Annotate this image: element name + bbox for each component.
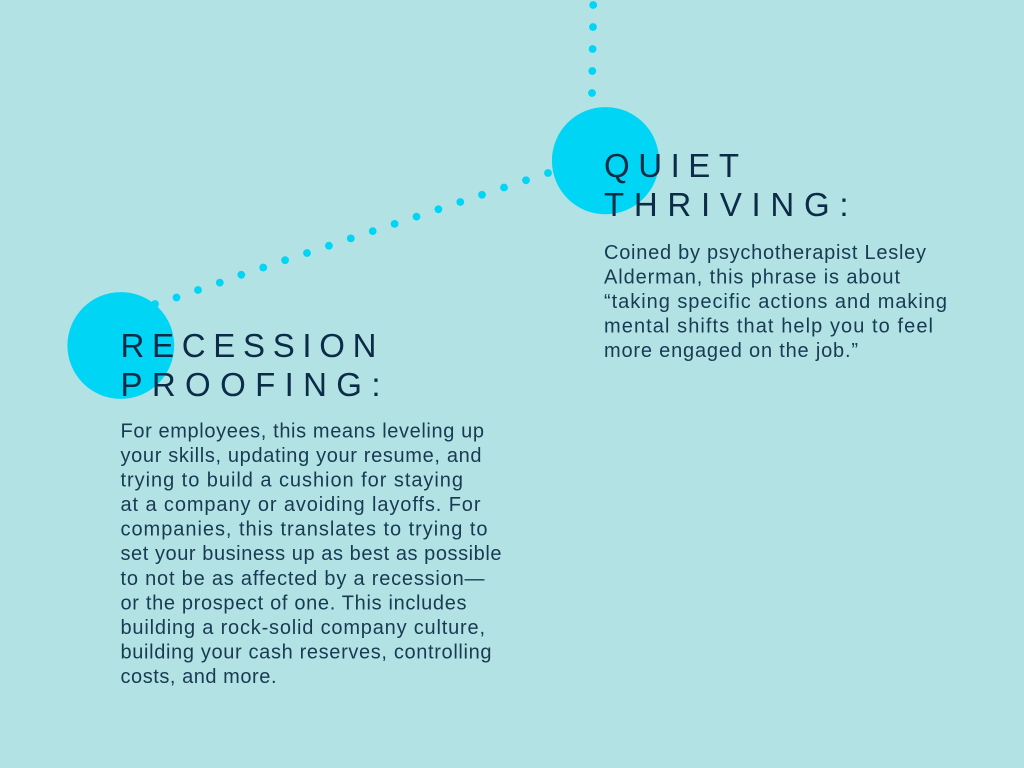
dotted connector: vertical from top: [588, 1, 597, 97]
heading: quiet thriving: THRIVING:: [604, 186, 848, 223]
text block: recession proofing description: [120, 420, 502, 688]
circle: quiet thriving marker: [552, 107, 659, 214]
text block: recession proofing description: trying to build a cushion for staying: [120, 470, 463, 492]
text block: quiet thriving description: more engaged on the job.”: [604, 340, 858, 362]
text block: recession proofing description: or the prospect of one. This includes: [120, 592, 466, 614]
text block: recession proofing description: companies, this translates to trying to: [120, 519, 488, 541]
text block: recession proofing description: building a rock-solid company culture,: [120, 617, 485, 639]
text block: recession proofing description: at a company or avoiding layoffs. For: [120, 494, 481, 516]
heading: quiet thriving: [604, 147, 848, 223]
text block: recession proofing description: to not be as affected by a recession—: [120, 568, 484, 590]
heading: recession proofing: RECESSION: [120, 327, 376, 364]
text block: quiet thriving description: Coined by psychotherapist Lesley: [604, 242, 926, 264]
text block: quiet thriving description: mental shifts that help you to feel: [604, 316, 933, 338]
circle: recession proofing marker: [67, 292, 174, 399]
heading: recession proofing: [120, 327, 380, 403]
text block: recession proofing description: your skills, updating your resume, and: [120, 445, 482, 467]
text block: quiet thriving description: “taking specific actions and making: [604, 291, 947, 313]
heading: recession proofing: PROOFING:: [120, 366, 380, 403]
text block: recession proofing description: set your business up as best as possible: [120, 543, 502, 565]
text block: recession proofing description: building your cash reserves, controlling: [120, 642, 492, 664]
text block: recession proofing description: For employees, this means leveling up: [120, 420, 484, 442]
dotted connector: diagonal between circles: [151, 169, 552, 308]
heading: quiet thriving: QUIET: [604, 147, 739, 184]
text block: quiet thriving description: Alderman, this phrase is about: [604, 266, 900, 288]
text block: recession proofing description: costs, and more.: [120, 666, 276, 688]
text block: quiet thriving description: [604, 242, 947, 362]
